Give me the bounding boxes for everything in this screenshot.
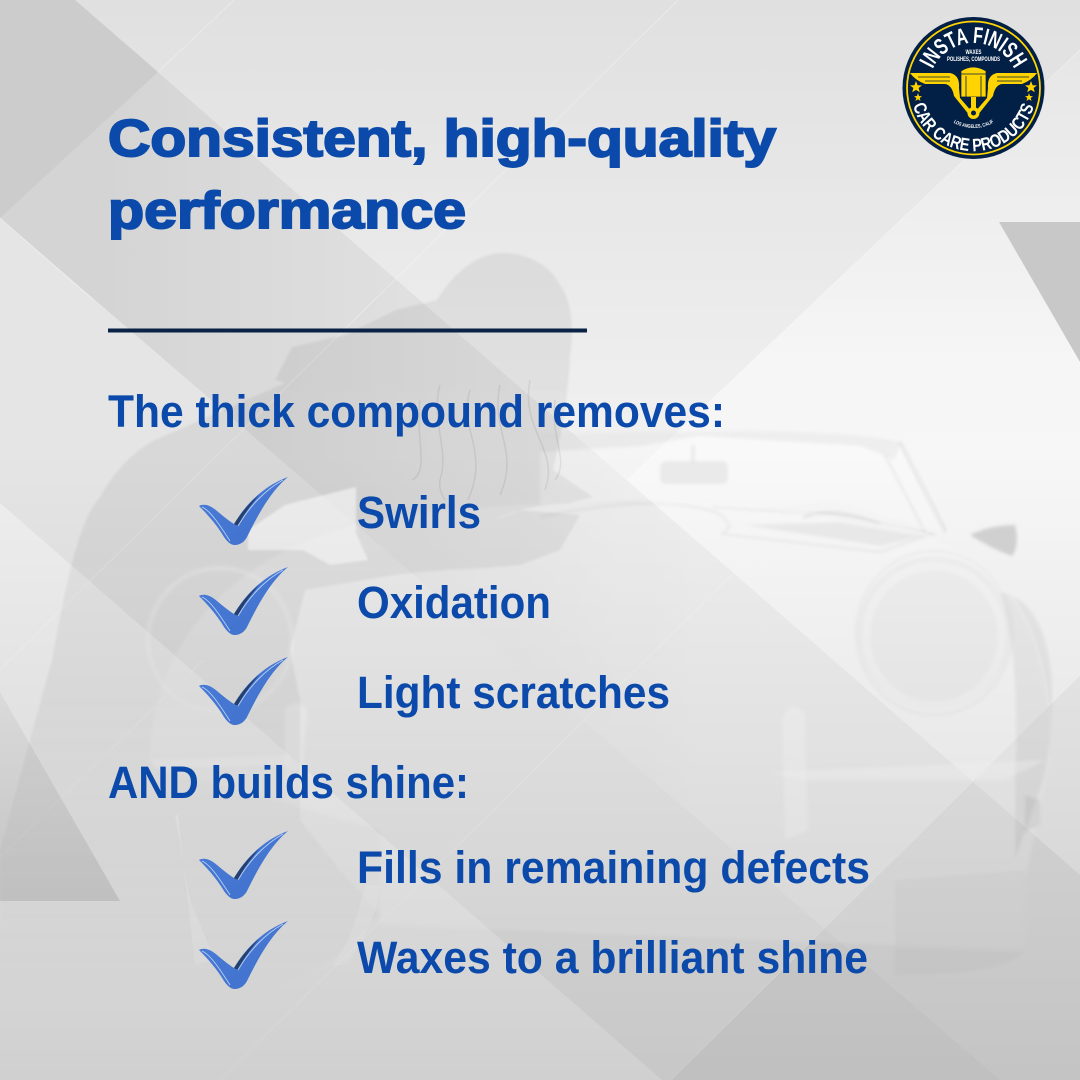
list item: fills in remaining defects bbox=[199, 831, 870, 899]
photo: vintage car bbox=[148, 430, 1052, 975]
logo text: polishes and compounds: POLISHES, COMPOUNDS bbox=[947, 57, 1000, 63]
list item: waxes to a brilliant shine: Waxes to a brilliant shine bbox=[357, 932, 868, 983]
logo text: car care products: CAR CARE PRODUCTS bbox=[914, 103, 1033, 152]
title: performance bbox=[108, 182, 466, 240]
title: Consistent, high-quality bbox=[108, 110, 776, 168]
logo: Insta Finish badge bbox=[902, 17, 1044, 159]
title bbox=[108, 110, 776, 240]
logo icon: right wing bbox=[974, 73, 1037, 116]
logo text: waxes: WAXES bbox=[966, 50, 982, 56]
heading: the thick compound removes: The thick compound removes: bbox=[108, 386, 725, 437]
list item: swirls: Swirls bbox=[357, 487, 481, 538]
list item: waxes to a brilliant shine bbox=[199, 921, 868, 989]
logo icon: piston bbox=[961, 67, 986, 119]
lower shading overlay bbox=[0, 450, 1080, 1080]
logo icon: stars bbox=[910, 81, 1037, 101]
logo text: location: LOS ANGELES, CALIF bbox=[954, 120, 993, 128]
list item: light scratches: Light scratches bbox=[357, 667, 670, 718]
decorative triangle: right bbox=[999, 222, 1080, 362]
logo icon: left wing bbox=[910, 73, 973, 116]
list item: fills in remaining defects: Fills in remaining defects bbox=[357, 842, 870, 893]
divider rule bbox=[108, 328, 587, 332]
decorative triangle: left bbox=[0, 692, 120, 901]
list item: oxidation: Oxidation bbox=[357, 577, 551, 628]
heading: and builds shine: AND builds shine: bbox=[108, 757, 469, 808]
list item: light scratches bbox=[199, 657, 670, 725]
photo: woman polishing the car bbox=[0, 253, 593, 1000]
logo text: brand name: INSTA FINISH bbox=[919, 27, 1028, 68]
list item: oxidation bbox=[199, 567, 551, 635]
list item: swirls bbox=[199, 477, 481, 545]
